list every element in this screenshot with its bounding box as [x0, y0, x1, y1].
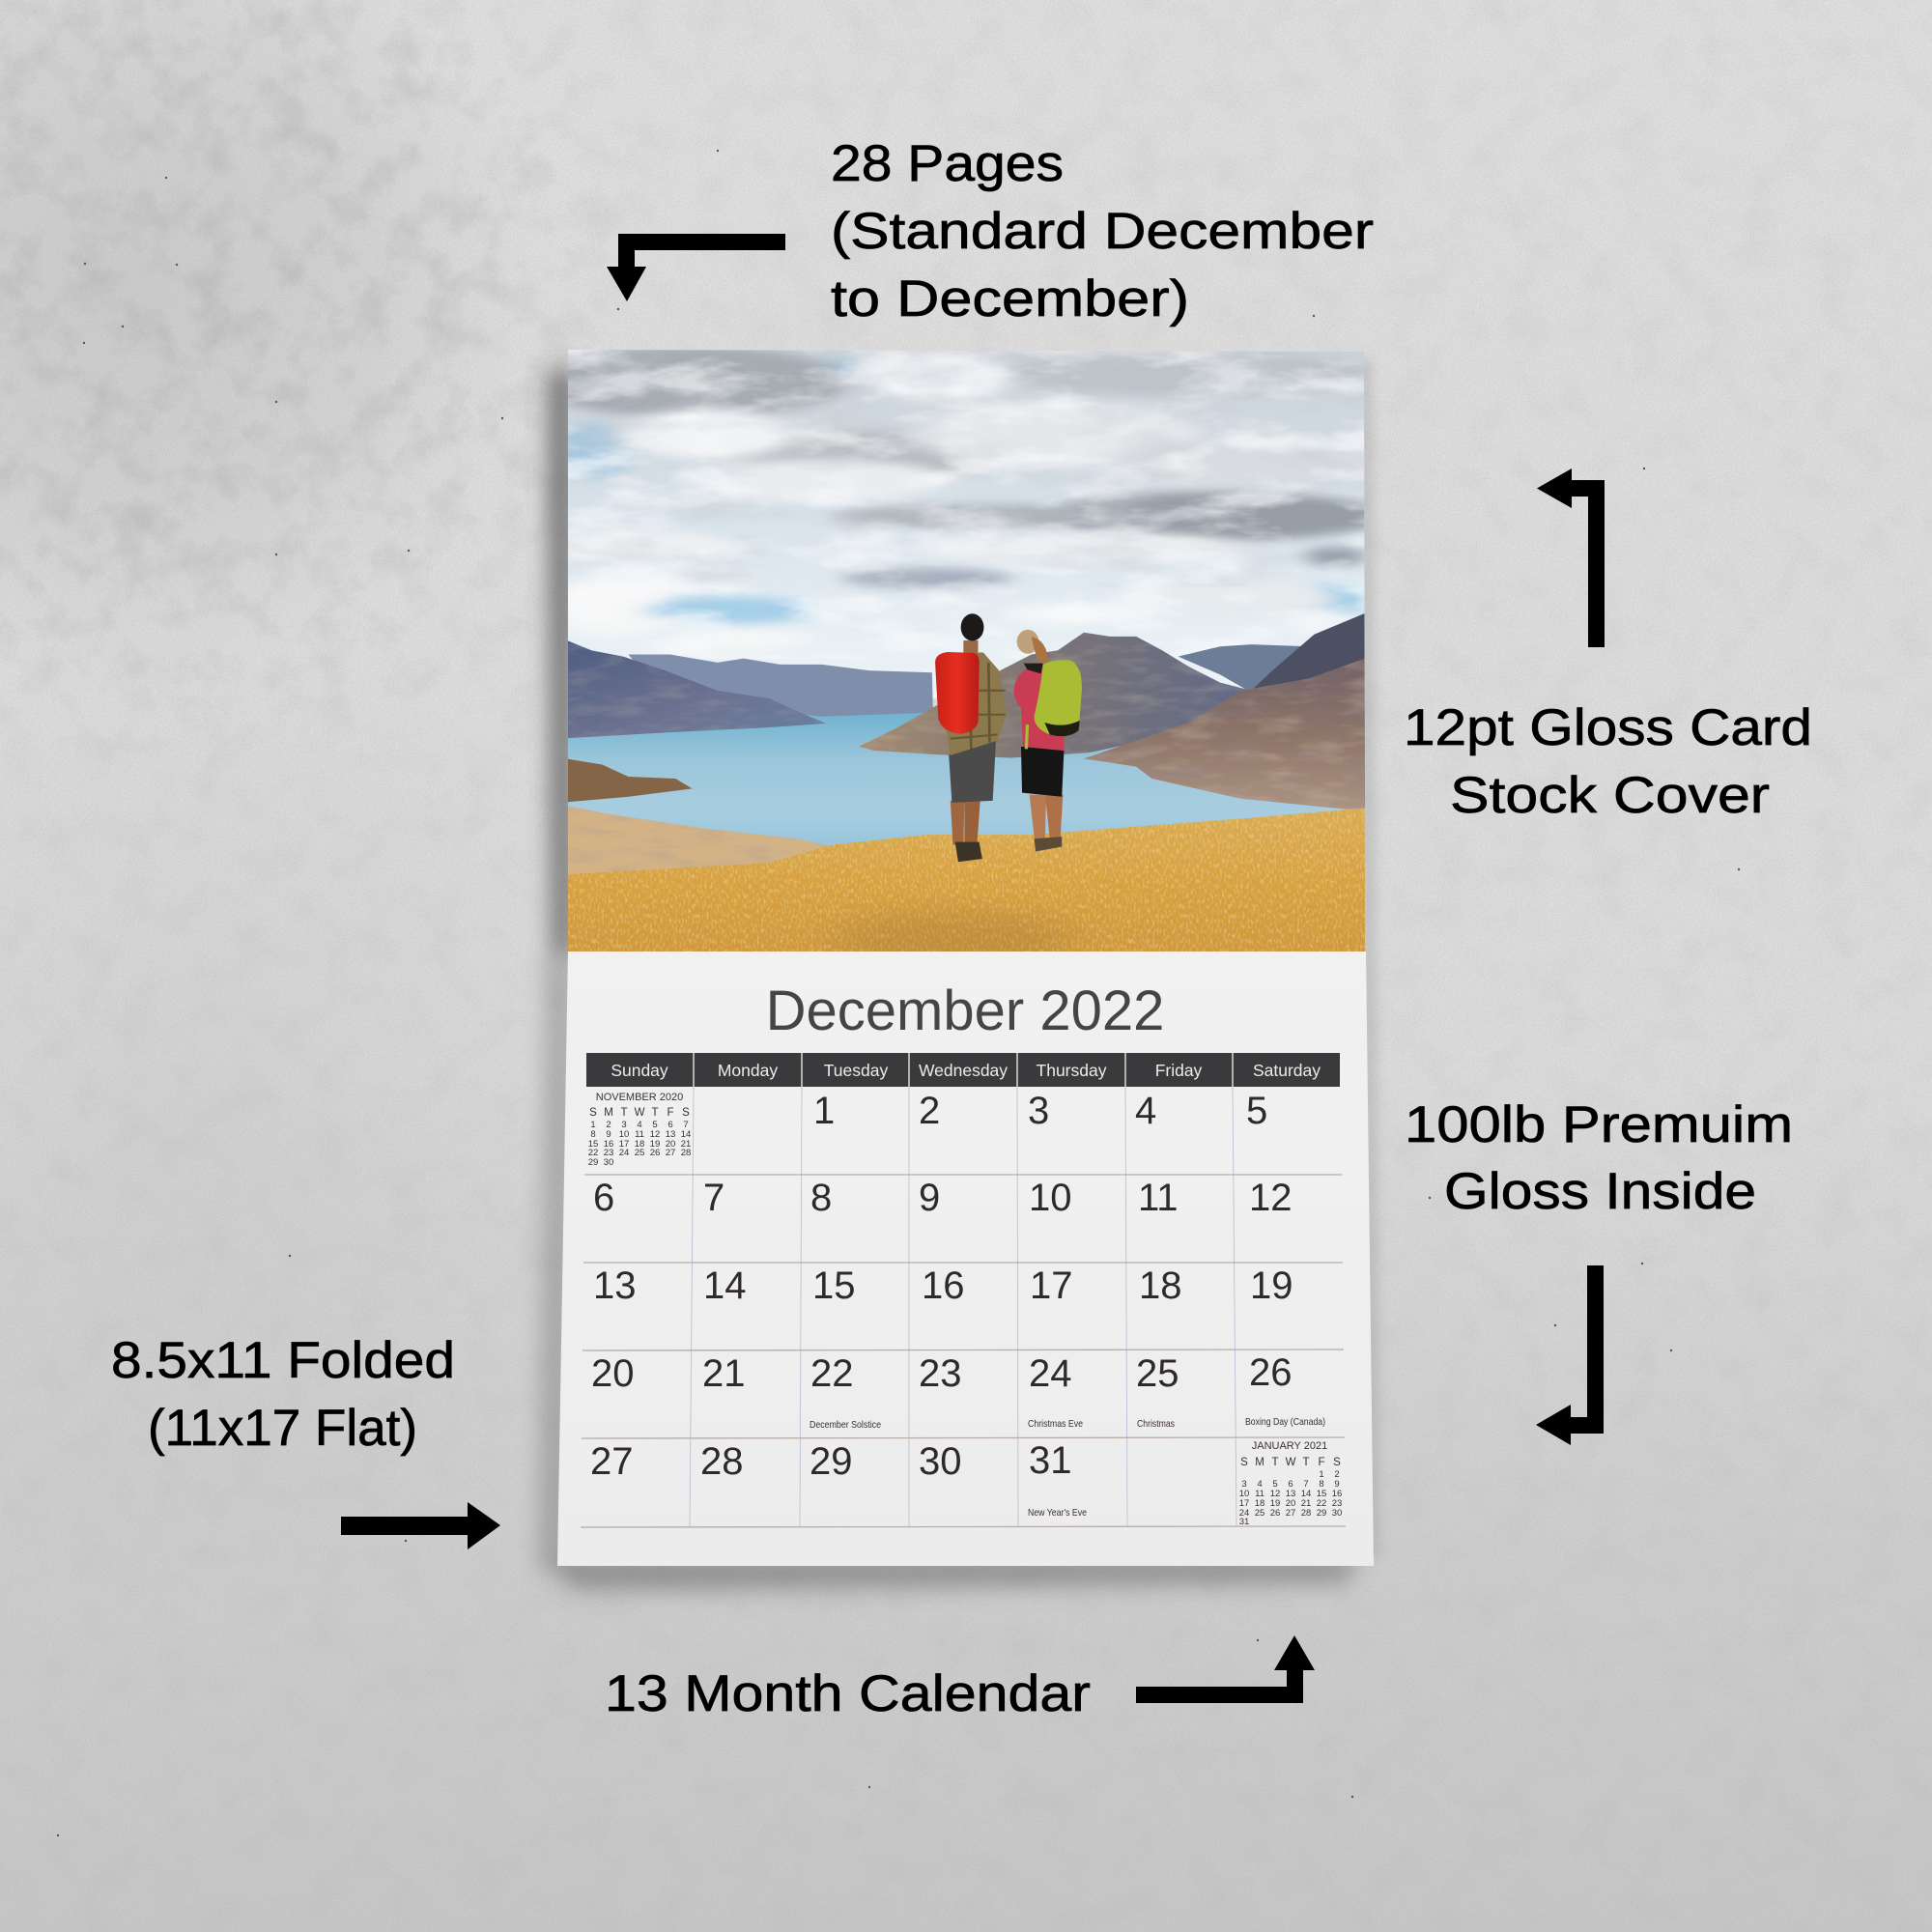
lake: [560, 711, 1381, 855]
mini calendar: November 2020: 18: [635, 1139, 644, 1150]
mini calendar: January 2021: JANUARY 2021: [1252, 1440, 1327, 1452]
mini calendar: November 2020: 27: [666, 1148, 675, 1158]
mini calendar: January 2021: 3: [1241, 1479, 1247, 1490]
mini calendar: January 2021: 23: [1332, 1498, 1342, 1509]
mini calendar: January 2021: 22: [1317, 1498, 1326, 1509]
weekday header band: Sunday: [611, 1061, 668, 1080]
mini calendar: November 2020: 26: [650, 1148, 660, 1158]
day numbers: 28: [700, 1440, 744, 1483]
mini calendar: November 2020: 25: [635, 1148, 644, 1158]
mini calendar: January 2021: 4: [1257, 1479, 1263, 1490]
mini calendar: November 2020: 5: [652, 1120, 658, 1130]
mountains: [560, 607, 1381, 877]
mini calendar: November 2020: W: [635, 1107, 645, 1119]
calendar grid page: [557, 952, 1374, 1566]
mini calendar: January 2021: 30: [1332, 1508, 1342, 1519]
mini calendar: January 2021: 5: [1272, 1479, 1278, 1490]
mini calendar: November 2020: 8: [590, 1129, 596, 1140]
day numbers: 30: [919, 1440, 962, 1483]
label: premium gloss inside: [1405, 1096, 1793, 1220]
mini calendar: January 2021: 26: [1270, 1508, 1280, 1519]
weekday header band: Saturday: [1253, 1061, 1321, 1080]
day numbers: 17: [1030, 1264, 1072, 1307]
mini calendar: January 2021: F: [1318, 1457, 1325, 1468]
label: 13 month calendar: 13 Month Calendar: [605, 1665, 1091, 1722]
day numbers: 11: [1138, 1177, 1179, 1219]
mini calendar: November 2020: 1: [590, 1120, 596, 1130]
arrow: premium gloss inside: [1536, 1265, 1604, 1445]
day numbers: 14: [703, 1264, 746, 1307]
sky with clouds: [534, 338, 1387, 698]
mini calendar: November 2020: T: [620, 1107, 628, 1119]
label: 28 pages: 28 Pages: [831, 135, 1064, 192]
weekday header band: Monday: [718, 1061, 778, 1080]
label: folded size: 8.5x11 Folded: [111, 1332, 455, 1389]
mini calendar: November 2020: 11: [635, 1129, 644, 1140]
mini calendar: January 2021: 9: [1334, 1479, 1340, 1490]
weekday header band: Wednesday: [919, 1061, 1008, 1080]
day numbers: 31: [1029, 1439, 1072, 1482]
day numbers: 16: [922, 1264, 964, 1307]
mini calendar: November 2020: 3: [621, 1120, 627, 1130]
calendar drop shadow: [539, 359, 1379, 1590]
day numbers: 21: [702, 1352, 746, 1395]
arrow: card stock cover: [1537, 469, 1605, 647]
mini calendar: November 2020: T: [651, 1107, 659, 1119]
mini calendar: November 2020: 28: [681, 1148, 691, 1158]
mini calendar: November 2020: 12: [650, 1129, 660, 1140]
mini calendar: November 2020: 21: [681, 1139, 691, 1150]
mini calendar: November 2020: 22: [588, 1148, 598, 1158]
day numbers: 25: [1136, 1352, 1179, 1395]
mini calendar: November 2020: 24: [619, 1148, 629, 1158]
arrow: 13 month calendar: [1136, 1635, 1315, 1703]
mini calendar: January 2021: 28: [1301, 1508, 1311, 1519]
mini calendar: January 2021: 7: [1303, 1479, 1309, 1490]
holiday labels: Boxing Day (Canada): [1245, 1416, 1325, 1428]
label: 28 pages: to December): [831, 270, 1189, 327]
day numbers: 6: [593, 1177, 614, 1219]
mini calendar: January 2021: 2: [1334, 1469, 1340, 1480]
holiday labels: [810, 1416, 1325, 1519]
day numbers: 15: [812, 1264, 856, 1307]
mini calendar: January 2021: T: [1271, 1457, 1279, 1468]
mini calendar: January 2021: 31: [1239, 1517, 1249, 1527]
weekday header band: Thursday: [1037, 1061, 1107, 1080]
label: card stock cover: 12pt Gloss Card: [1404, 699, 1812, 756]
day numbers: 2: [919, 1090, 940, 1132]
day numbers: 8: [810, 1177, 832, 1219]
mini calendar: January 2021: 29: [1317, 1508, 1326, 1519]
label: 28 pages: [831, 135, 1374, 327]
mini calendar: January 2021: 17: [1239, 1498, 1249, 1509]
label: folded size: [111, 1332, 455, 1457]
label: premium gloss inside: Gloss Inside: [1444, 1163, 1756, 1220]
holiday labels: Christmas: [1137, 1418, 1175, 1430]
mini calendar: January 2021: 8: [1319, 1479, 1324, 1490]
holiday labels: New Year's Eve: [1028, 1507, 1087, 1519]
mini calendar: January 2021: 6: [1288, 1479, 1293, 1490]
mini calendar: January 2021: 24: [1239, 1508, 1249, 1519]
arrow: 28 pages to calendar top: [607, 234, 785, 301]
mini calendar: November 2020: 29: [588, 1157, 598, 1168]
mini calendar: November 2020: 16: [604, 1139, 613, 1150]
mini calendar: November 2020: [588, 1092, 691, 1168]
mini calendar: January 2021: 20: [1286, 1498, 1295, 1509]
mini calendar: November 2020: 4: [637, 1120, 642, 1130]
mini calendar: November 2020: 13: [666, 1129, 675, 1140]
holiday labels: Christmas Eve: [1028, 1418, 1083, 1430]
mini calendar: November 2020: 10: [619, 1129, 629, 1140]
day numbers: 27: [590, 1440, 634, 1483]
mini calendar: January 2021: 12: [1270, 1489, 1280, 1499]
mini calendar: January 2021: 14: [1301, 1489, 1311, 1499]
weekday header band: Tuesday: [824, 1061, 888, 1080]
day numbers: 9: [919, 1177, 940, 1219]
calendar photo page: [568, 350, 1365, 952]
mini calendar: January 2021: S: [1240, 1457, 1248, 1468]
mini calendar: November 2020: 19: [650, 1139, 660, 1150]
mini calendar: November 2020: 15: [588, 1139, 598, 1150]
day numbers: 29: [810, 1440, 852, 1483]
mini calendar: January 2021: 10: [1239, 1489, 1249, 1499]
day numbers: 22: [810, 1352, 854, 1395]
day numbers: 10: [1029, 1177, 1072, 1219]
day numbers: 19: [1250, 1264, 1293, 1307]
day numbers: 4: [1135, 1090, 1156, 1132]
mini calendar: January 2021: 16: [1332, 1489, 1342, 1499]
mini calendar: November 2020: F: [667, 1107, 674, 1119]
day numbers: 24: [1029, 1352, 1072, 1395]
day numbers: 26: [1249, 1351, 1293, 1394]
mini calendar: November 2020: 6: [668, 1120, 673, 1130]
mini calendar: January 2021: T: [1302, 1457, 1310, 1468]
weekday header band: [586, 1053, 1340, 1087]
mini calendar: January 2021: [1239, 1440, 1342, 1527]
day numbers: 18: [1139, 1264, 1182, 1307]
day numbers: 23: [919, 1352, 962, 1395]
label: 28 pages: (Standard December: [831, 203, 1374, 260]
mini calendar: January 2021: W: [1286, 1457, 1296, 1468]
hiker man with red backpack: [935, 613, 1007, 862]
mini calendar: January 2021: 13: [1286, 1489, 1295, 1499]
mini calendar: January 2021: 25: [1255, 1508, 1264, 1519]
mini calendar: November 2020: 7: [683, 1120, 689, 1130]
label: card stock cover: [1404, 699, 1812, 824]
label: folded size: (11x17 Flat): [148, 1400, 417, 1457]
arrow: folded size: [341, 1502, 500, 1549]
day numbers: 12: [1249, 1177, 1293, 1219]
mini calendar: November 2020: 30: [604, 1157, 613, 1168]
golden grass: [568, 808, 1365, 952]
day numbers: 3: [1028, 1090, 1049, 1132]
mini calendar: November 2020: NOVEMBER 2020: [596, 1092, 683, 1103]
mini calendar: January 2021: 11: [1255, 1489, 1264, 1499]
mini calendar: November 2020: 2: [606, 1120, 611, 1130]
mini calendar: November 2020: 9: [606, 1129, 611, 1140]
mini calendar: January 2021: 19: [1270, 1498, 1280, 1509]
mini calendar: January 2021: S: [1333, 1457, 1341, 1468]
mini calendar: January 2021: 15: [1317, 1489, 1326, 1499]
label: premium gloss inside: 100lb Premuim: [1405, 1096, 1793, 1153]
day numbers: 20: [591, 1352, 634, 1395]
day numbers: 7: [703, 1177, 724, 1219]
weekday header band: Friday: [1155, 1061, 1203, 1080]
mini calendar: November 2020: 17: [619, 1139, 629, 1150]
mini calendar: January 2021: 27: [1286, 1508, 1295, 1519]
mini calendar: January 2021: M: [1255, 1457, 1264, 1468]
day numbers: 13: [593, 1264, 636, 1307]
mini calendar: November 2020: 20: [666, 1139, 675, 1150]
day numbers: 5: [1246, 1090, 1267, 1132]
mini calendar: January 2021: 21: [1301, 1498, 1311, 1509]
hiker woman with green backpack: [1013, 630, 1082, 852]
mini calendar: November 2020: S: [589, 1107, 597, 1119]
mini calendar: January 2021: 1: [1319, 1469, 1324, 1480]
mini calendar: November 2020: S: [682, 1107, 690, 1119]
day numbers: [590, 1090, 1293, 1483]
mini calendar: November 2020: 14: [681, 1129, 691, 1140]
label: card stock cover: Stock Cover: [1450, 767, 1770, 824]
mini calendar: November 2020: 23: [604, 1148, 613, 1158]
holiday labels: December Solstice: [810, 1419, 881, 1431]
mini calendar: November 2020: M: [604, 1107, 613, 1119]
month title: December 2022: [766, 980, 1164, 1042]
mini calendar: January 2021: 18: [1255, 1498, 1264, 1509]
day numbers: 1: [813, 1090, 835, 1132]
